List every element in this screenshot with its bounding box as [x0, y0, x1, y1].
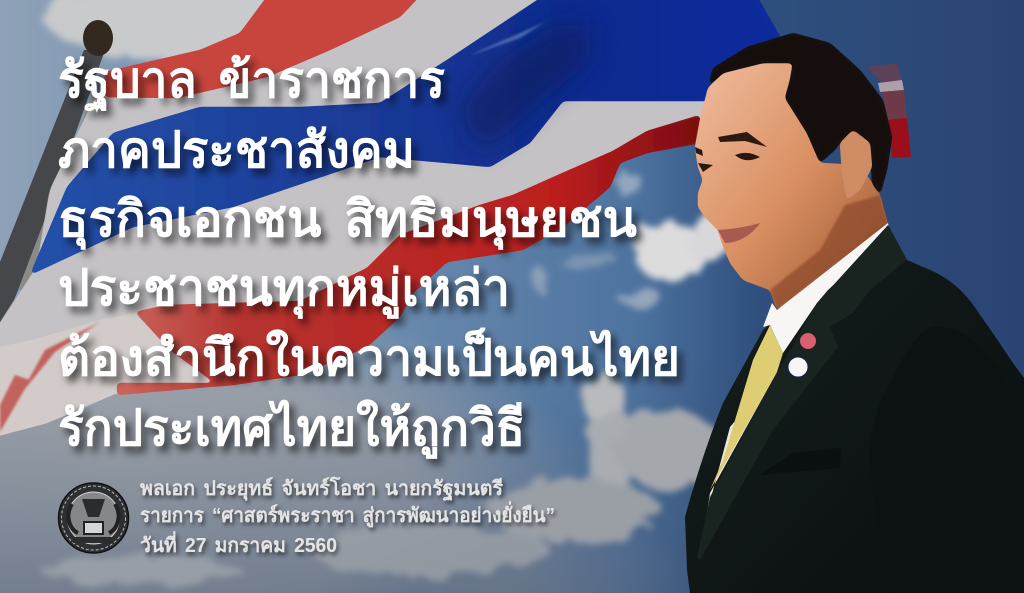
clouds [40, 0, 730, 584]
shirt front [707, 372, 777, 513]
mouth [718, 223, 760, 243]
hair [708, 33, 892, 195]
source text: พลเอก ประยุทธ์ จันทร์โอชา นายกรัฐมนตรี [140, 476, 503, 502]
sleeve [870, 326, 1024, 593]
ear [840, 130, 872, 200]
flag: red streaks [0, 322, 100, 432]
lapel pin [800, 333, 816, 349]
tie [710, 325, 783, 490]
eyebrow [695, 132, 767, 156]
flag: right end behind head [867, 63, 902, 83]
neck and face [695, 63, 888, 310]
heading: ประชาชนทุกหมู่เหล่า [58, 260, 510, 319]
flag: upper red band [105, 0, 440, 98]
flag pole [0, 20, 113, 322]
flag: blue folds [460, 25, 590, 150]
heading: ธุรกิจเอกชน สิทธิมนุษยชน [58, 191, 637, 250]
flag: blue highlight [470, 22, 545, 55]
collar [763, 223, 890, 353]
heading: ภาคประชาสังคม [58, 122, 415, 178]
heading: ต้องสำนึกในความเป็นคนไทย [58, 327, 680, 386]
heading: รัฐบาล ข้าราชการ [58, 52, 445, 112]
source text: รายการ “ศาสตร์พระราชา สู่การพัฒนาอย่างยั่งยืน” [140, 500, 555, 529]
source text [140, 476, 555, 557]
portrait of the prime minister [685, 33, 1024, 593]
government seal icon [58, 483, 128, 553]
pocket [760, 448, 841, 475]
eyes [698, 153, 760, 172]
flag: lower red band [117, 115, 700, 395]
neck shadow [770, 195, 888, 310]
lapel [697, 225, 907, 560]
flag: blue band [30, 0, 782, 275]
source text: วันที่ 27 มกราคม 2560 [140, 530, 337, 557]
flag: pale frayed tail [0, 312, 220, 442]
flag: white underlay [0, 0, 782, 362]
suit jacket [685, 225, 1024, 593]
white badge [788, 357, 808, 377]
heading: รักประเทศไทยให้ถูกวิธี [58, 399, 525, 459]
Thai flag [0, 0, 911, 442]
heading [58, 52, 680, 459]
